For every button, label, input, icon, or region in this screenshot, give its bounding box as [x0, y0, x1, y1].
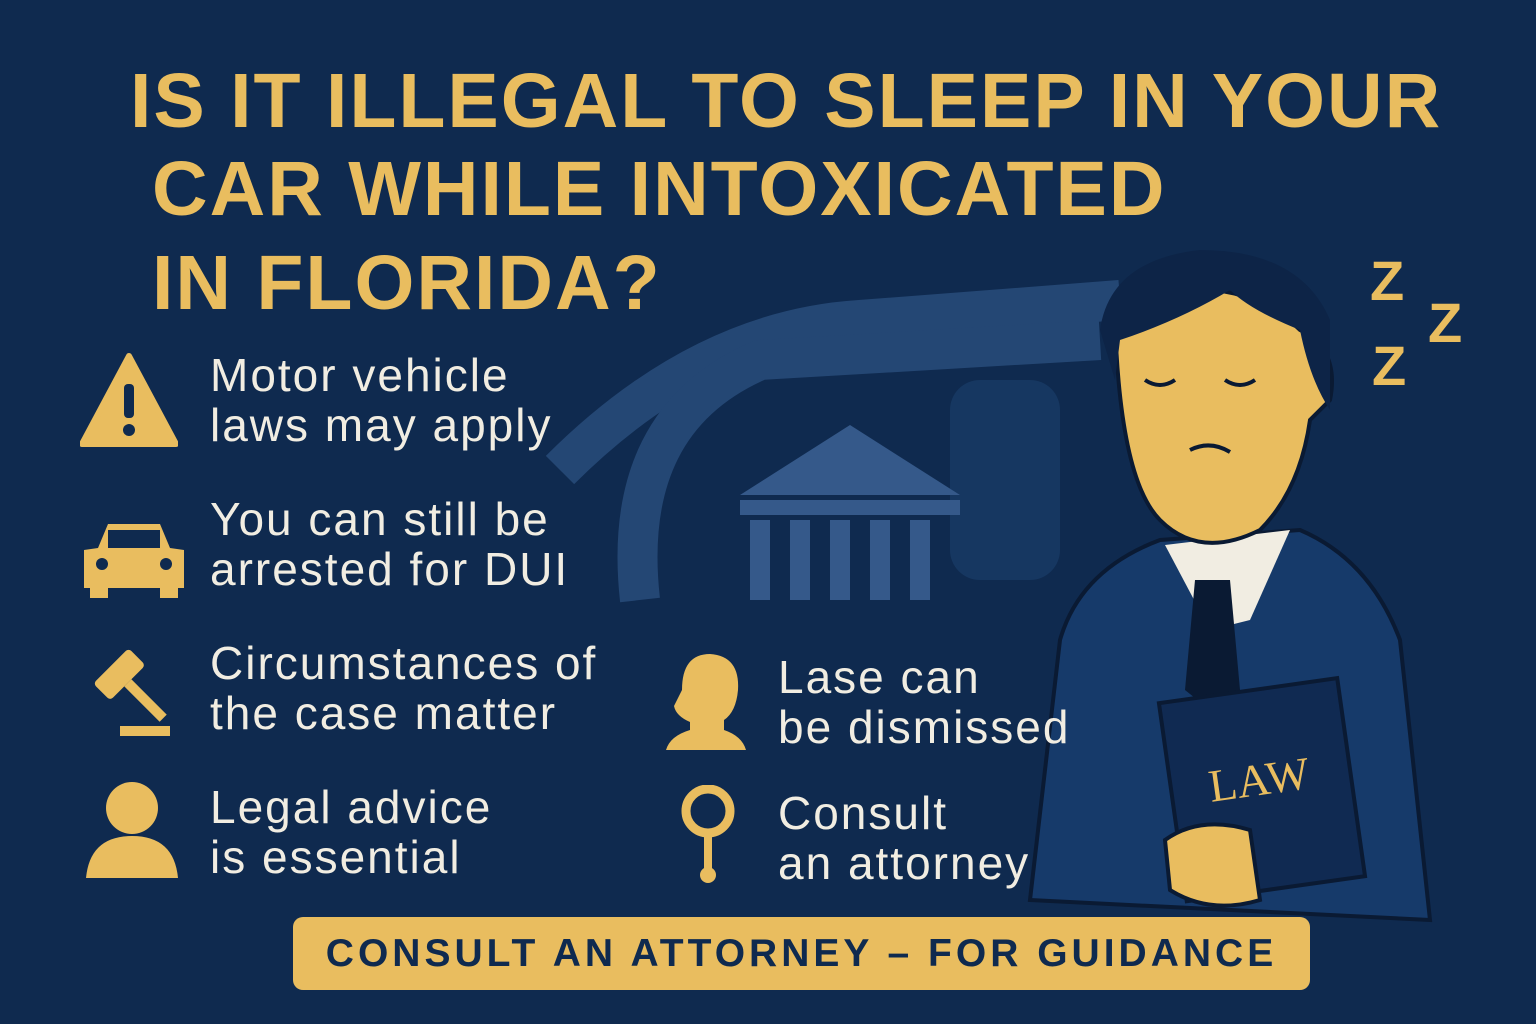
neck/face [1115, 288, 1332, 543]
bottom banner: CONSULT AN ATTORNEY – FOR GUIDANCE [326, 932, 1277, 975]
body [1030, 530, 1430, 920]
item: circumstances [94, 637, 597, 739]
person illustration [1028, 249, 1462, 922]
item: case dismissed [666, 651, 1070, 753]
text: IN FLORIDA? [152, 240, 662, 326]
item: motor vehicle laws [80, 349, 552, 451]
icon: person [86, 782, 178, 878]
zzz: Z [1372, 334, 1406, 397]
item: legal advice [86, 781, 492, 883]
text: be dismissed [778, 701, 1070, 753]
text: laws may apply [210, 399, 552, 451]
text: Motor vehicle [210, 349, 510, 401]
text: the case matter [210, 687, 557, 739]
text: Consult [778, 787, 948, 839]
zzz: Z [1370, 249, 1404, 312]
bottom banner [293, 917, 1310, 990]
text: IS IT ILLEGAL TO SLEEP IN YOUR [130, 58, 1442, 144]
item: DUI [84, 493, 569, 598]
book [1159, 678, 1365, 901]
text: Circumstances of [210, 637, 597, 689]
text: Lase can [778, 651, 981, 703]
text: CAR WHILE INTOXICATED [152, 146, 1166, 232]
text: is essential [210, 831, 462, 883]
hair [1100, 250, 1330, 410]
icon: car [84, 524, 184, 598]
zzz: Z [1428, 291, 1462, 354]
item: consult [682, 785, 1030, 889]
icon: gavel [94, 650, 170, 736]
zzz [1370, 249, 1462, 397]
text: Legal advice [210, 781, 492, 833]
icon: warning [80, 353, 178, 447]
icon: pin [682, 785, 734, 883]
icon: head [666, 654, 746, 750]
book: LAW [1205, 747, 1313, 812]
text: arrested for DUI [210, 543, 569, 595]
text: You can still be [210, 493, 550, 545]
title [130, 58, 1442, 326]
text: an attorney [778, 837, 1030, 889]
